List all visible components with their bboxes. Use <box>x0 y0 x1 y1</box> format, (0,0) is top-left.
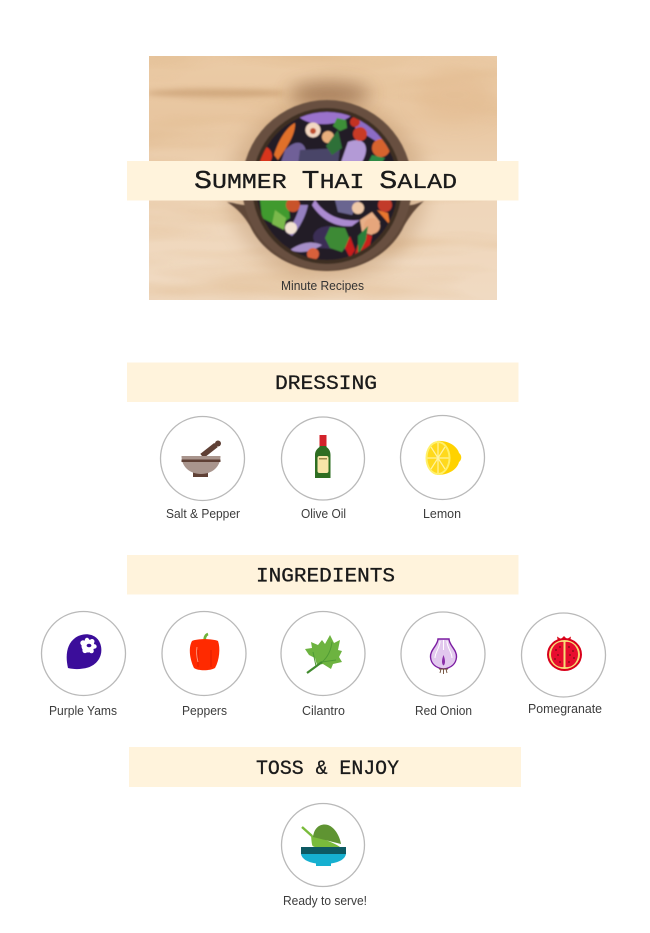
item: peppers <box>162 612 246 718</box>
heading: dressing: DRESSING <box>275 373 377 396</box>
label: Peppers <box>182 704 227 718</box>
section: dressing <box>127 362 518 402</box>
item: salt and pepper <box>160 416 244 521</box>
photo caption: Minute Recipes <box>281 279 364 293</box>
label: Ready to serve! <box>283 894 367 908</box>
item: pomegranate <box>522 613 606 716</box>
label: Salt & Pepper <box>166 507 240 521</box>
icon: red pepper <box>190 634 219 670</box>
icon: pomegranate <box>547 636 582 671</box>
icon: salad bowl with leaf <box>301 825 346 866</box>
section: toss and enjoy <box>129 747 521 787</box>
icon: mortar and pestle <box>182 440 221 477</box>
label: Olive Oil <box>301 507 346 521</box>
title text: SUMMER THAI SALAD <box>194 166 457 196</box>
section: ingredients <box>127 555 518 594</box>
icon: purple yam <box>67 634 101 669</box>
label: Lemon <box>423 507 461 521</box>
title banner <box>127 161 518 200</box>
hero photo: salad bowl on wood <box>145 56 497 300</box>
item: red onion <box>401 612 485 718</box>
icon: olive oil bottle <box>315 435 330 478</box>
heading: ingredients: INGREDIENTS <box>256 566 395 588</box>
icon: cilantro leaf <box>305 635 342 673</box>
item: purple yams <box>42 612 126 718</box>
icon: lemon half <box>426 441 461 475</box>
heading: toss and enjoy: TOSS & ENJOY <box>256 758 399 781</box>
item: ready to serve <box>282 804 367 908</box>
item: lemon <box>400 416 484 521</box>
label: Cilantro <box>302 704 345 718</box>
item: cilantro <box>281 612 365 718</box>
label: Purple Yams <box>49 704 117 718</box>
icon: red onion <box>430 639 457 674</box>
label: Pomegranate <box>528 702 602 716</box>
item: olive oil <box>282 417 364 521</box>
label: Red Onion <box>415 704 472 718</box>
